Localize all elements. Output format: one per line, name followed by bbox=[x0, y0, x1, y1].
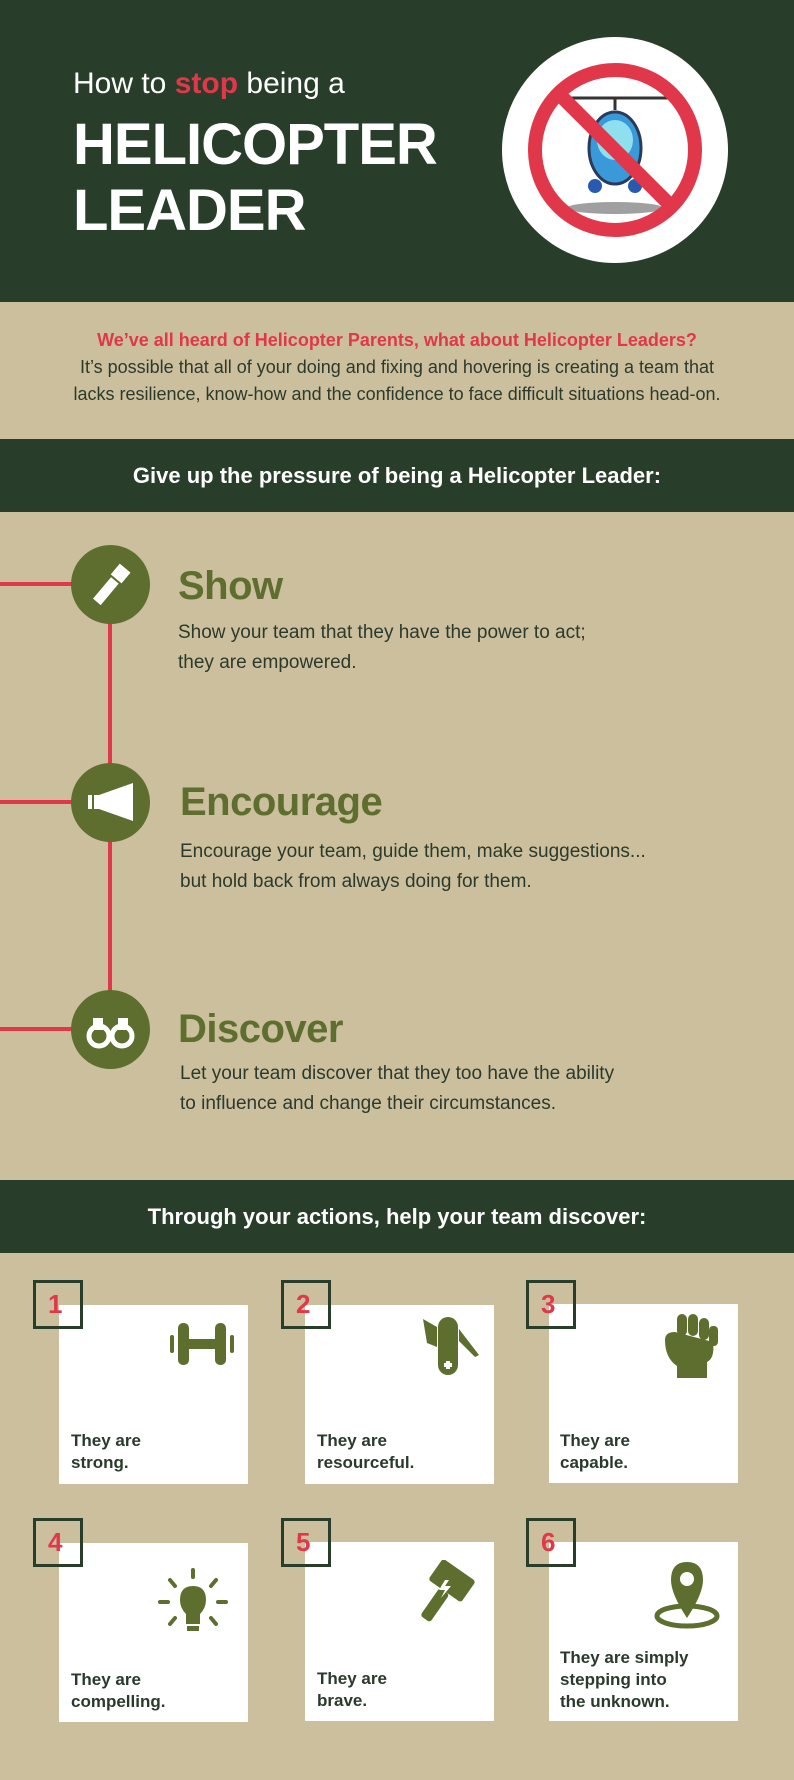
card text: stepping into bbox=[560, 1670, 667, 1689]
card 4 bbox=[33, 1518, 248, 1722]
icon: hammer bbox=[421, 1560, 475, 1622]
intro text: We’ve all heard of Helicopter Parents, what about Helicopter Leaders? bbox=[97, 330, 697, 350]
icon: fist bbox=[665, 1314, 718, 1378]
intro text: lacks resilience, know-how and the confidence to face difficult situations head-on. bbox=[73, 384, 721, 404]
icon: megaphone bbox=[71, 763, 150, 842]
icon: location pin bbox=[654, 1562, 720, 1628]
step: discover: to influence and change their circumstances. bbox=[180, 1093, 556, 1114]
icon: binoculars bbox=[71, 990, 150, 1069]
title: HELICOPTER bbox=[73, 112, 437, 177]
section heading band 2 bbox=[0, 1180, 794, 1253]
number 3 bbox=[526, 1280, 576, 1329]
card text: They are bbox=[560, 1431, 630, 1450]
icon: dumbbell bbox=[170, 1323, 234, 1365]
number 6: 6 bbox=[541, 1527, 555, 1557]
step: encourage: Encourage bbox=[180, 780, 382, 824]
card text: capable. bbox=[560, 1453, 628, 1472]
card 1 bbox=[33, 1280, 248, 1484]
number 2: 2 bbox=[296, 1289, 310, 1319]
number 5 bbox=[281, 1518, 331, 1567]
step: discover: Let your team discover that they too have the ability bbox=[180, 1063, 614, 1084]
card text: They are bbox=[71, 1670, 141, 1689]
number 4 bbox=[33, 1518, 83, 1567]
card text bbox=[560, 1648, 689, 1711]
icon: flashlight bbox=[71, 545, 150, 624]
header panel bbox=[0, 0, 794, 302]
step: encourage: Encourage your team, guide them, make suggestions... bbox=[180, 841, 646, 862]
section heading band 2: Through your actions, help your team discover: bbox=[148, 1204, 646, 1229]
card text: the unknown. bbox=[560, 1692, 670, 1711]
card text bbox=[317, 1431, 414, 1472]
step: encourage: but hold back from always doing for them. bbox=[180, 871, 532, 892]
card text bbox=[71, 1431, 141, 1472]
number 1: 1 bbox=[48, 1289, 62, 1319]
card text: brave. bbox=[317, 1691, 367, 1710]
intro text: It’s possible that all of your doing and fixing and hovering is creating a team that bbox=[80, 357, 714, 377]
timeline line bbox=[0, 582, 112, 1031]
number 4: 4 bbox=[48, 1527, 62, 1557]
number 5: 5 bbox=[296, 1527, 310, 1557]
card text: strong. bbox=[71, 1453, 129, 1472]
card text: They are simply bbox=[560, 1648, 689, 1667]
intro text bbox=[73, 330, 721, 404]
card text: They are bbox=[71, 1431, 141, 1450]
step: show: they are empowered. bbox=[178, 652, 356, 673]
step: show: Show bbox=[178, 564, 283, 608]
step: show: Show your team that they have the power to act; bbox=[178, 622, 586, 643]
title: How to stop being a bbox=[73, 67, 345, 100]
card text: They are bbox=[317, 1669, 387, 1688]
number 6 bbox=[526, 1518, 576, 1567]
number 2 bbox=[281, 1280, 331, 1329]
card text: They are bbox=[317, 1431, 387, 1450]
card 6 bbox=[526, 1518, 738, 1721]
number 1 bbox=[33, 1280, 83, 1329]
icon: no helicopter bbox=[502, 37, 728, 263]
card 3 bbox=[526, 1280, 738, 1483]
card text bbox=[71, 1670, 165, 1711]
card 2 bbox=[281, 1280, 494, 1484]
step: show bbox=[178, 564, 586, 673]
card text bbox=[317, 1669, 387, 1710]
card text: resourceful. bbox=[317, 1453, 414, 1472]
section heading band 1: Give up the pressure of being a Helicopter Leader: bbox=[133, 463, 661, 488]
step: discover bbox=[178, 1007, 614, 1114]
card text: compelling. bbox=[71, 1692, 165, 1711]
number 3: 3 bbox=[541, 1289, 555, 1319]
title: LEADER bbox=[73, 178, 305, 243]
icon: swiss knife bbox=[423, 1317, 479, 1375]
icon: light bulb bbox=[158, 1568, 228, 1631]
card text bbox=[560, 1431, 630, 1472]
step: encourage bbox=[180, 780, 646, 892]
section heading band 1 bbox=[0, 439, 794, 512]
title bbox=[73, 67, 437, 243]
card 5 bbox=[281, 1518, 494, 1721]
step: discover: Discover bbox=[178, 1007, 343, 1051]
